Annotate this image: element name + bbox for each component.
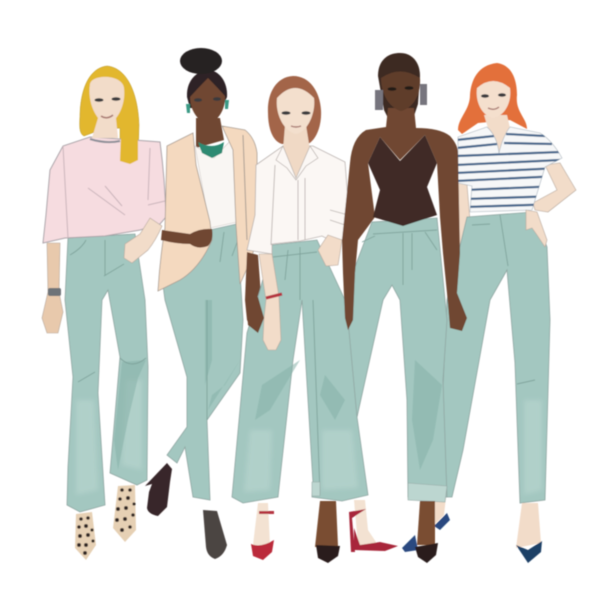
hair xyxy=(378,53,420,122)
jeans xyxy=(65,234,148,512)
navy shoe right xyxy=(516,541,542,563)
jeans shading xyxy=(255,360,345,420)
hand on hip xyxy=(526,210,547,247)
red heeled shoe right xyxy=(349,500,398,552)
neck xyxy=(196,118,224,148)
black heeled bootie xyxy=(145,463,172,516)
leopard spots right xyxy=(115,488,136,532)
face xyxy=(477,81,510,118)
red pump xyxy=(251,540,274,560)
jeans xyxy=(163,224,243,500)
white top xyxy=(195,138,237,228)
ankle and foot xyxy=(253,503,270,545)
shirt stripes xyxy=(456,134,560,207)
shirt collar xyxy=(276,146,318,180)
leopard spots left xyxy=(77,516,95,555)
striped shirt xyxy=(458,127,562,212)
neck xyxy=(92,118,118,138)
leopard shoe right xyxy=(113,485,136,542)
hair xyxy=(458,63,527,134)
shirt xyxy=(247,146,350,254)
earrings xyxy=(375,84,427,110)
shirt placket and folds xyxy=(271,165,348,245)
red shoe left xyxy=(251,503,274,560)
right arm xyxy=(533,163,576,212)
hair xyxy=(80,66,139,160)
mouth xyxy=(291,126,301,127)
crossed forearm and hand xyxy=(161,229,212,248)
arms, shoulders and neck xyxy=(342,108,467,331)
blazer right panel xyxy=(222,126,257,284)
jeans shading xyxy=(205,300,240,410)
face xyxy=(277,88,314,134)
jeans light wash xyxy=(524,400,542,495)
left foot xyxy=(315,501,338,547)
figure 2 hand overlapping xyxy=(246,297,264,333)
collar xyxy=(90,139,120,142)
cuff buttons xyxy=(312,482,320,496)
navy shoe left xyxy=(402,513,450,552)
left arm and hand xyxy=(259,254,281,350)
mouth xyxy=(488,107,499,109)
foot xyxy=(354,500,378,545)
red strap xyxy=(259,511,274,514)
neck xyxy=(283,125,310,177)
jeans xyxy=(232,240,383,503)
right foot xyxy=(417,501,435,545)
watch xyxy=(48,288,61,296)
jeans seams xyxy=(362,230,437,285)
figure 5: red-haired woman in striped tee xyxy=(402,63,576,563)
hair bun xyxy=(180,48,222,74)
earrings xyxy=(186,100,229,113)
face xyxy=(89,77,124,125)
bracelet xyxy=(266,294,282,298)
blazer lapel line xyxy=(243,135,247,240)
sweater folds xyxy=(63,146,165,238)
eyes xyxy=(282,111,310,115)
leopard shoe left xyxy=(75,512,96,560)
foot behind xyxy=(434,497,446,525)
figure 3: woman in white shirt xyxy=(232,76,398,560)
eyes xyxy=(194,97,221,102)
rolled cuff xyxy=(408,483,447,502)
illustration: five women in mint jeans xyxy=(41,47,577,564)
neck xyxy=(484,115,510,154)
figure 1: blonde woman in pink sweater xyxy=(42,66,166,560)
figure 4: woman in dark tank top xyxy=(315,53,467,563)
black shoe left xyxy=(316,545,340,563)
jeans seams xyxy=(207,232,238,420)
black shoe right xyxy=(415,543,438,563)
jeans seams xyxy=(70,240,146,382)
red pump xyxy=(354,528,398,551)
eyes xyxy=(388,86,414,91)
face xyxy=(381,72,420,111)
eyes xyxy=(481,93,506,98)
jeans light wash xyxy=(76,380,142,495)
necklace xyxy=(198,142,224,158)
face xyxy=(190,78,225,124)
jeans seams xyxy=(472,215,535,384)
left arm xyxy=(456,182,475,333)
right forearm xyxy=(245,252,262,333)
right hand in pocket xyxy=(318,235,342,266)
skin foot right xyxy=(516,503,541,548)
mouth xyxy=(101,115,113,118)
jeans xyxy=(438,212,550,503)
figure 2: woman in blazer with hair bun xyxy=(145,48,262,559)
blazer left panel xyxy=(158,133,212,291)
jeans xyxy=(348,218,447,497)
jeans shading xyxy=(412,360,442,470)
jeans light wash xyxy=(244,430,358,492)
right hand xyxy=(124,218,162,263)
jeans shading xyxy=(114,360,146,470)
sweater xyxy=(43,137,166,243)
eyes xyxy=(94,97,120,102)
hair xyxy=(187,70,227,108)
tank top xyxy=(368,135,437,226)
heel and strap xyxy=(349,509,366,552)
left arm and hand xyxy=(42,243,63,333)
jeans seams xyxy=(273,247,320,495)
grey boot xyxy=(203,510,227,559)
sweater hair overlay xyxy=(120,132,138,164)
hair xyxy=(268,76,321,144)
